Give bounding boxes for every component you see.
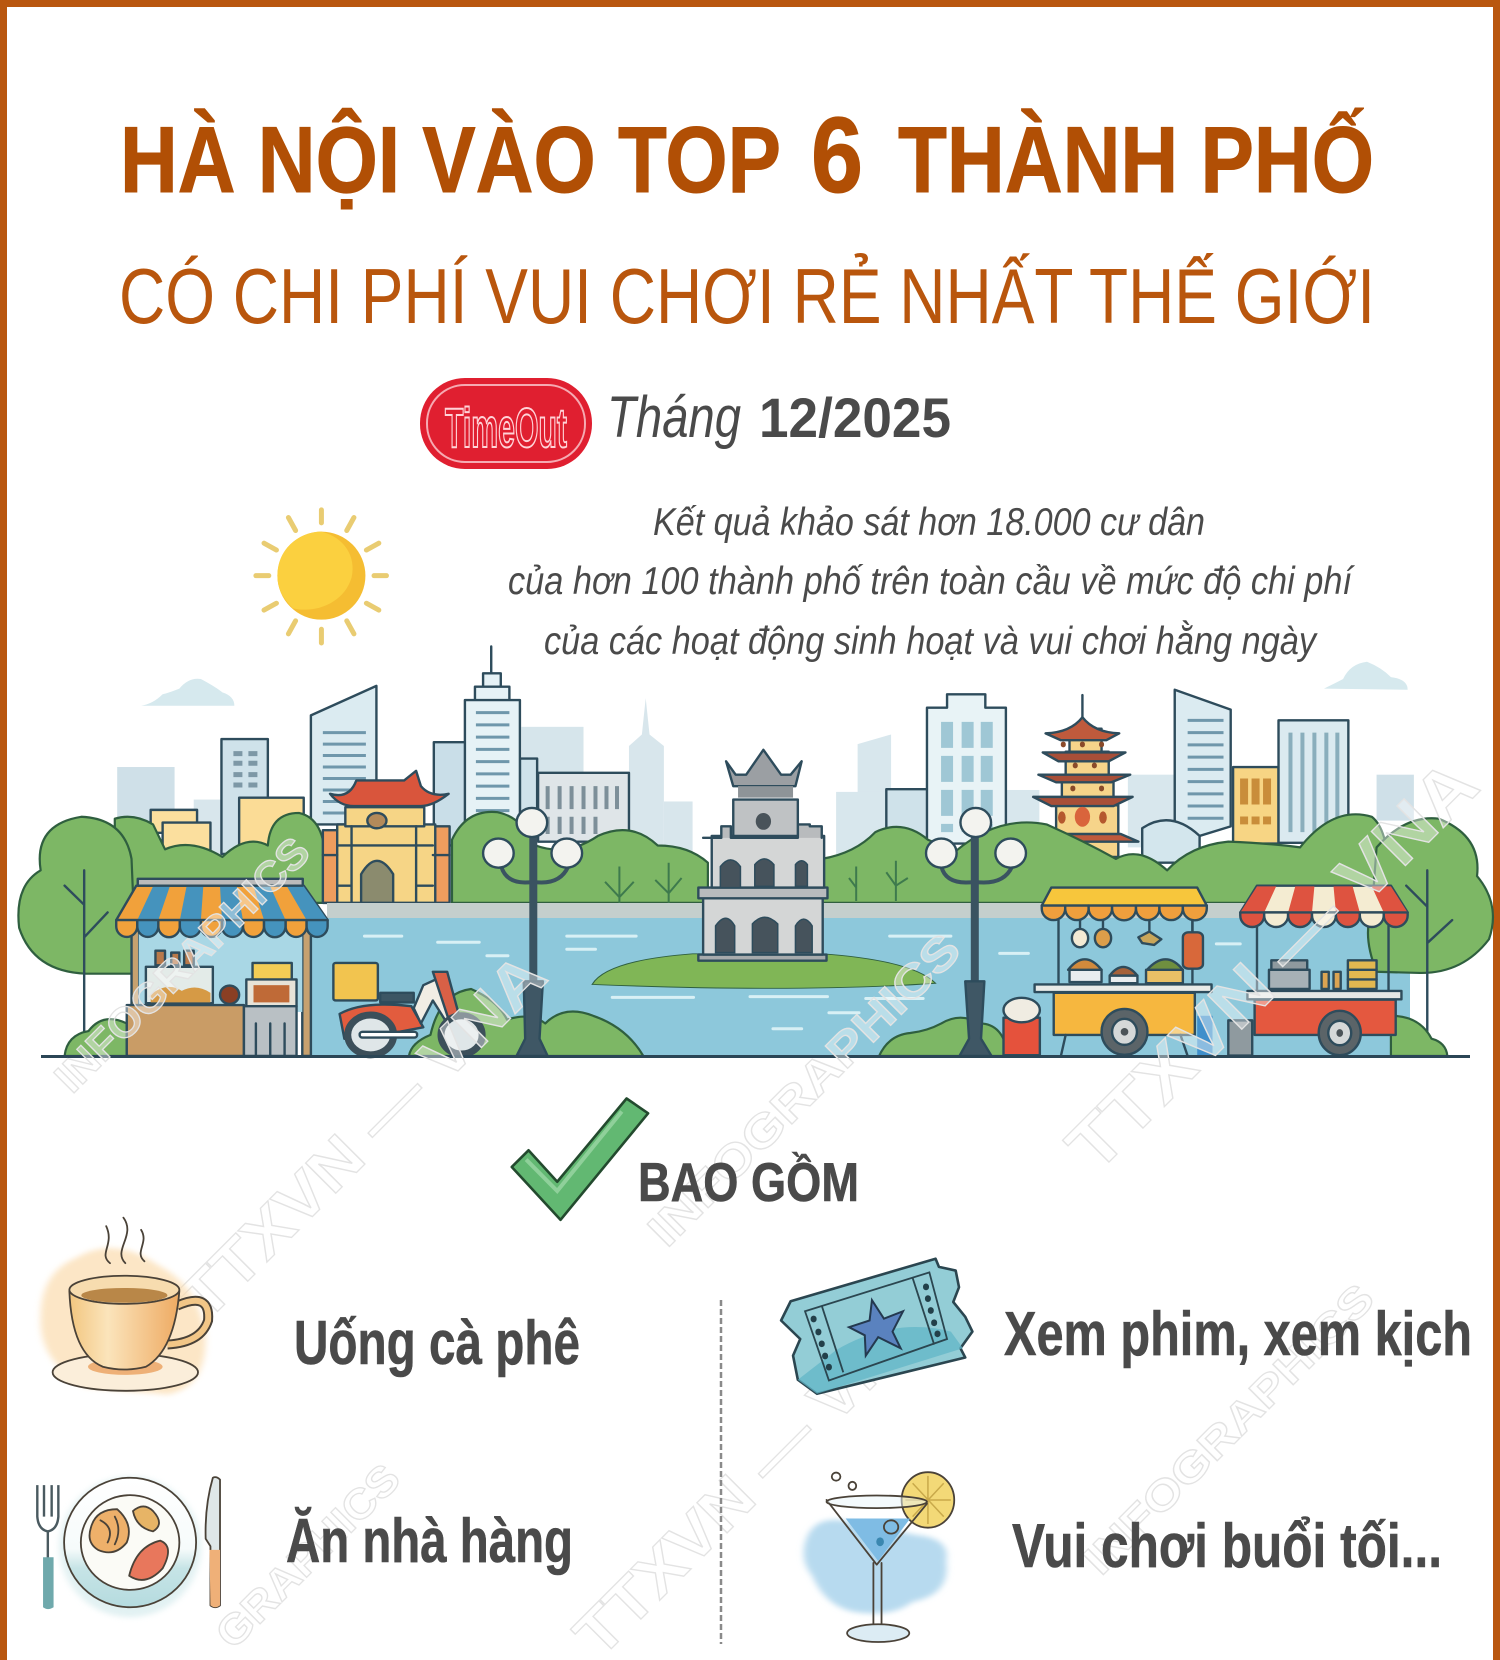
watermarks: INFOGRAPHICS [45,828,319,1101]
intro text [508,501,1355,663]
date value: 12/2025 [759,386,951,449]
pagoda [1033,695,1138,857]
lake water [312,918,1410,1057]
title: 6 [811,94,863,215]
divider [720,1300,722,1644]
Turtle Tower [698,750,827,961]
red stall [1240,886,1408,1055]
icon: coffee cup [41,1218,208,1394]
left foreground [18,808,643,1056]
lake bank [327,903,1247,919]
bins and boxes [1003,998,1252,1056]
right skyline buildings [836,662,1414,863]
ground line [41,1055,1470,1058]
watermarks [45,744,1493,1660]
title: HÀ NỘI VÀO TOP [120,107,781,212]
right foreground [879,808,1493,1056]
check mark [512,1098,648,1220]
scooter [333,963,482,1055]
watermarks: GRAPHICS [206,1454,409,1657]
label: restaurant: Ăn nhà hàng [286,1507,573,1576]
icon: sun [256,510,386,643]
label: coffee: Uống cà phê [294,1309,580,1378]
illustration: city skyline and Hoan Kiem lake [18,646,1493,1058]
icon: cocktail [804,1472,954,1642]
source logo: Time Out [420,378,592,469]
watermarks: TTXVN — VNA [1051,744,1493,1186]
left tree [18,817,136,1035]
intro text: Kết quả khảo sát hơn 18.000 cư dân [653,501,1205,544]
heading: included: BAO GỒM [638,1151,859,1213]
title: THÀNH PHỐ [898,107,1374,212]
right tree [1368,818,1493,1035]
icon: cinema ticket [781,1259,972,1394]
watermarks: INFOGRAPHICS [1074,1274,1383,1583]
watermarks: INFOGRAPHICS [637,923,970,1256]
street lamp right [926,808,1026,1056]
Doan Mon citadel gate [323,771,450,903]
water ripples [364,936,1240,1029]
green tree line [115,812,1388,903]
Hoan Kiem island [592,954,936,988]
icon: plate and cutlery [37,1477,220,1617]
bush [65,1019,127,1056]
left skyline buildings [117,646,693,863]
bush behind scooter [409,989,643,1056]
date: Tháng [607,385,741,450]
market stall [116,879,328,1056]
intro text: của hơn 100 thành phố trên toàn cầu về mức độ chi phí [508,560,1355,603]
title [119,94,1375,340]
source logo: Time Out: TimeOut [445,396,567,459]
food cart [1035,888,1212,1056]
watermarks: TTXVN — VNA [561,1285,946,1660]
bushes [879,1018,1008,1056]
watermarks: TTXVN — VNA [167,940,560,1333]
intro text: của các hoạt động sinh hoạt và vui chơi hằng ngày [544,620,1318,663]
street lamp left [483,808,582,1056]
